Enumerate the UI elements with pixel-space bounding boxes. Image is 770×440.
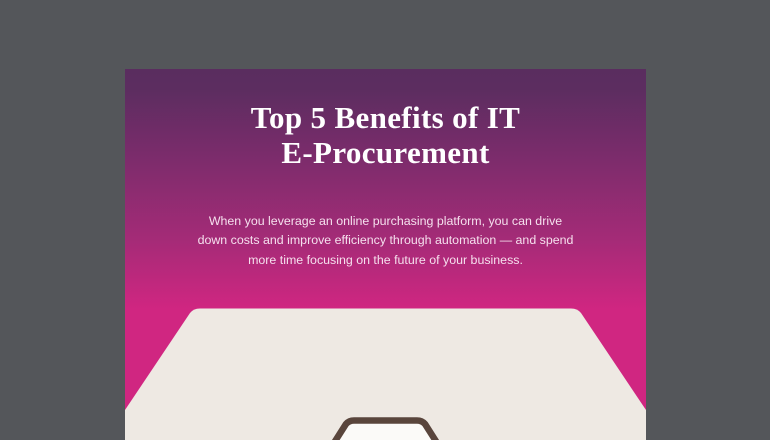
title: E-Procurement bbox=[281, 135, 490, 170]
beige trapezoid card bbox=[125, 308, 646, 440]
intro text: down costs and improve efficiency through automation — and spend bbox=[198, 233, 573, 247]
title: Top 5 Benefits of IT bbox=[251, 100, 520, 135]
intro text: more time focusing on the future of your business. bbox=[248, 253, 523, 267]
panel: infographic header bbox=[125, 69, 646, 440]
icon: hexagon badge bbox=[332, 420, 439, 440]
intro text bbox=[198, 214, 573, 267]
title bbox=[251, 100, 520, 170]
intro text: When you leverage an online purchasing platform, you can drive bbox=[209, 214, 562, 228]
